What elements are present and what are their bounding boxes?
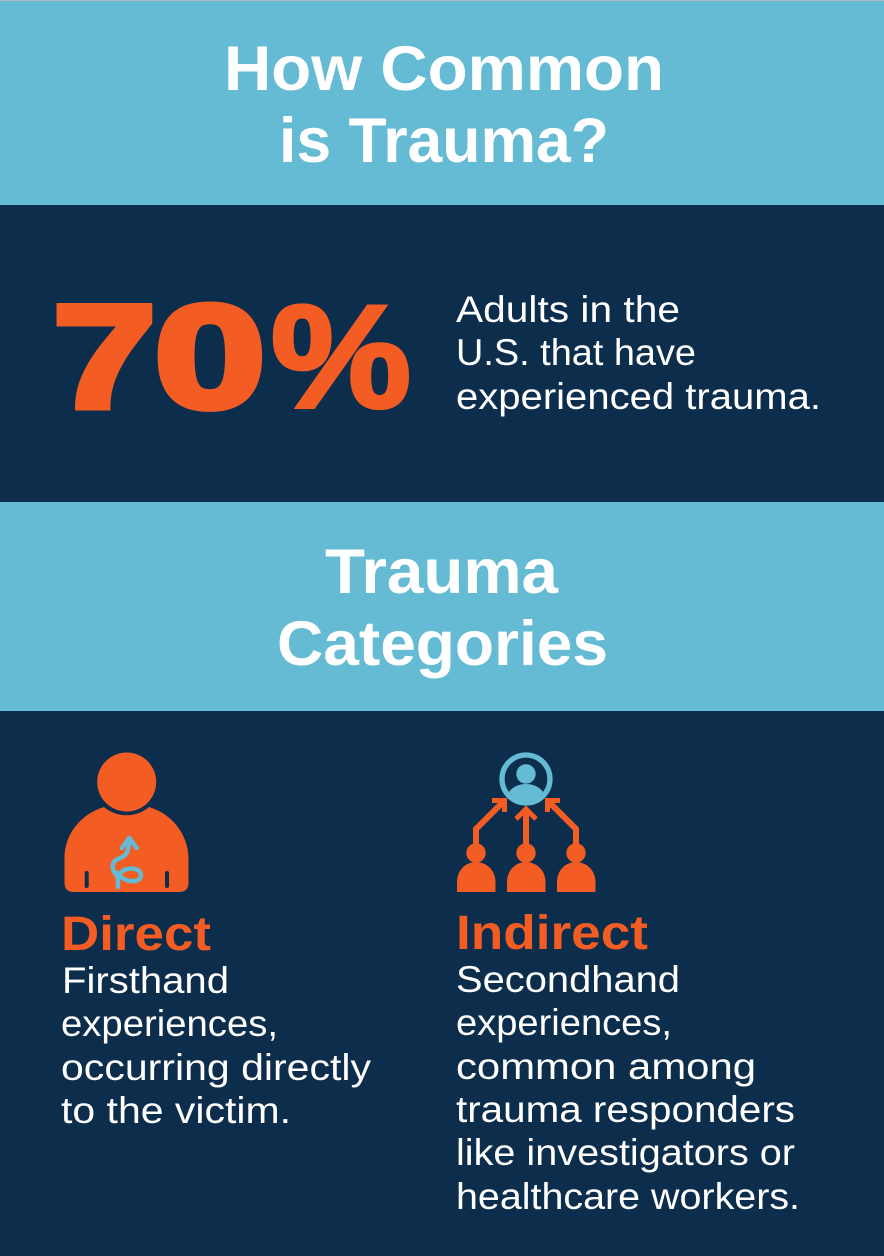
text: adults statistic description: U.S. that have <box>456 332 696 373</box>
text: direct description: Firsthand <box>62 960 229 1001</box>
big number: 70%: 0 <box>154 275 266 438</box>
text: direct description: experiences, <box>61 1003 278 1044</box>
panel: statistic <box>0 205 884 502</box>
icon: direct trauma person <box>64 752 188 892</box>
heading: How Common is Trauma: is Trauma? <box>279 106 609 176</box>
category: direct <box>61 908 372 1131</box>
category: indirect: Indirect <box>456 907 648 960</box>
panel: how common header <box>0 0 884 205</box>
panel: categories <box>0 711 884 1256</box>
big number: 70% <box>53 275 411 438</box>
text: adults statistic description <box>456 289 821 417</box>
text: indirect description: Secondhand <box>456 959 680 1000</box>
heading: How Common is Trauma <box>224 34 664 176</box>
text: indirect description: trauma responders <box>456 1089 795 1130</box>
text: adults statistic description: Adults in the <box>456 289 680 330</box>
big number: 70%: 7 <box>53 275 156 438</box>
text: direct description: to the victim. <box>61 1090 291 1131</box>
panel: trauma categories header <box>0 502 884 711</box>
heading: Trauma Categories: Categories <box>277 609 608 679</box>
heading: How Common is Trauma: How Common <box>224 34 664 104</box>
heading: Trauma Categories: Trauma <box>325 537 559 607</box>
text: indirect description: like investigators or <box>456 1132 795 1173</box>
text: indirect description: common among <box>456 1046 756 1087</box>
text: direct description <box>61 960 372 1131</box>
text: indirect description <box>456 959 800 1217</box>
text: indirect description: healthcare workers. <box>456 1176 800 1217</box>
text: direct description: occurring directly <box>61 1047 372 1088</box>
text: indirect description: experiences, <box>456 1002 672 1043</box>
big number: 70%: % <box>271 275 411 438</box>
text: adults statistic description: experienced trauma. <box>456 376 821 417</box>
category: direct: Direct <box>61 908 211 961</box>
icon: indirect trauma network <box>457 755 596 892</box>
heading: Trauma Categories <box>277 537 608 679</box>
category: indirect <box>456 907 800 1217</box>
